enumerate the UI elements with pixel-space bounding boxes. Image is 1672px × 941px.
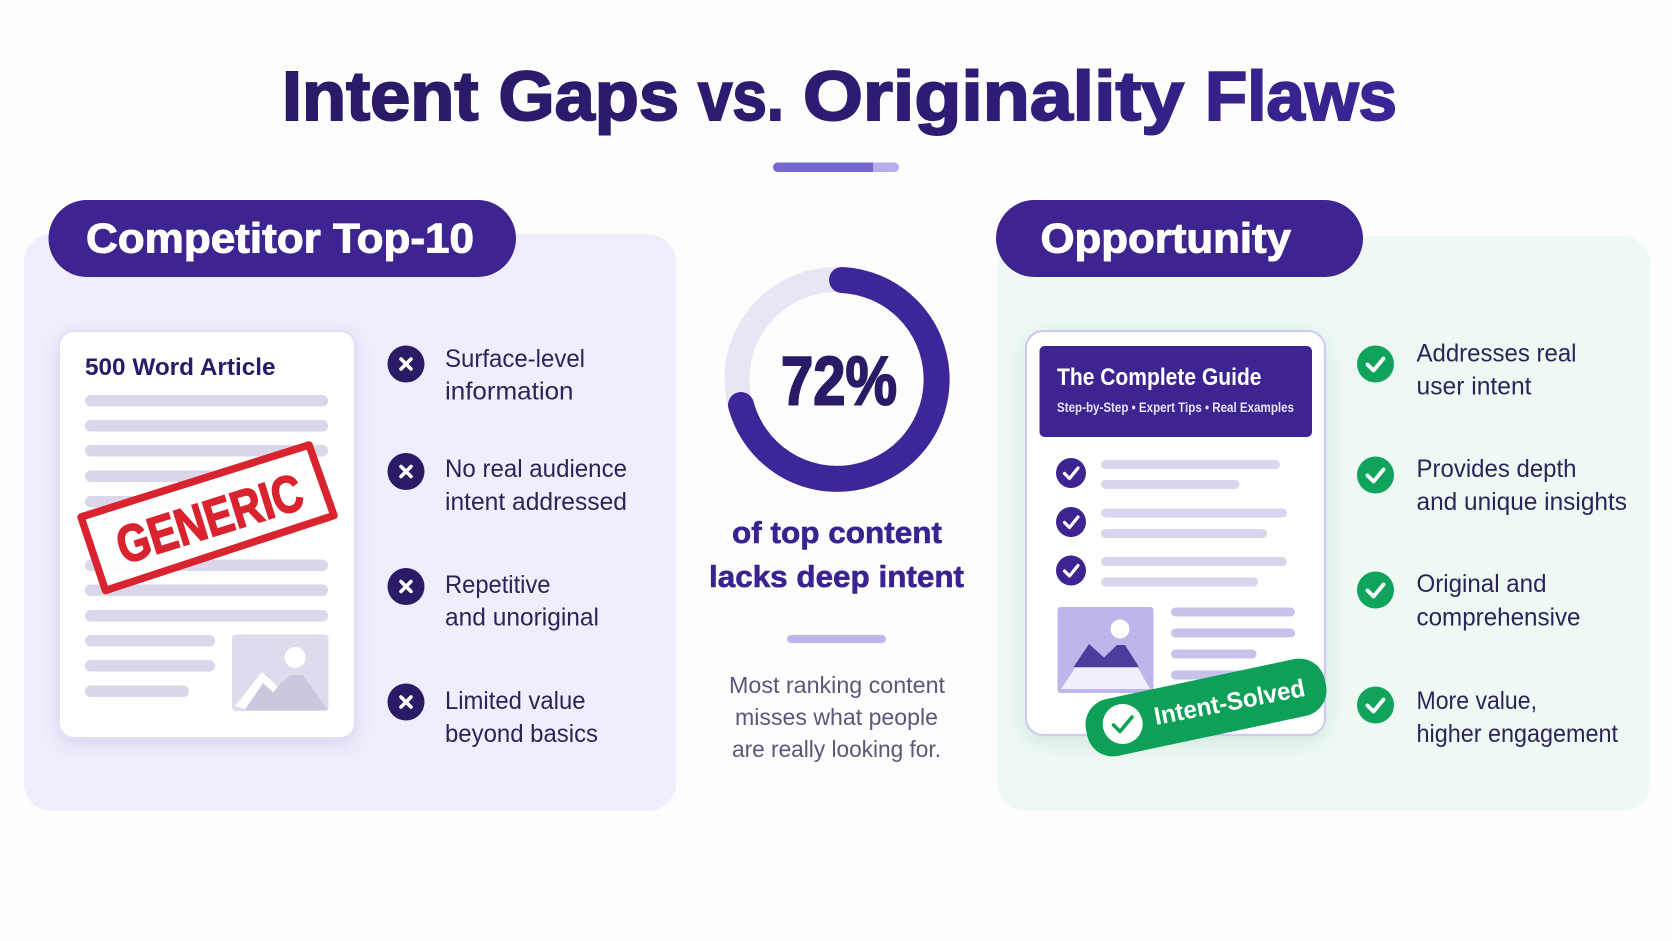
title: Intent Gaps [282, 57, 679, 135]
benefit 2: and unique insights [1416, 488, 1627, 516]
flaw 3: Repetitive [445, 571, 550, 599]
stat caption: of top content [732, 515, 942, 550]
benefit 1: Addresses real [1416, 340, 1576, 368]
list: opportunity benefits [1357, 340, 1627, 748]
supporting text [729, 672, 945, 762]
short divider [787, 635, 886, 643]
title: vs. [698, 57, 784, 135]
flaw 2: intent addressed [445, 488, 627, 516]
flaw 3 [388, 568, 599, 632]
article card: 500 word article [59, 331, 355, 738]
flaw 4: beyond basics [445, 720, 598, 748]
heading pill: opportunity [996, 200, 1363, 277]
benefit 4: More value, [1416, 687, 1537, 715]
flaw 2: No real audience [445, 455, 627, 483]
donut chart 72% [737, 280, 937, 479]
flaw 4 [388, 684, 598, 748]
flaw 2 [388, 453, 627, 516]
flaw 1 [388, 345, 585, 406]
guide text lines [1171, 608, 1295, 680]
benefit 3: Original and [1416, 570, 1546, 598]
checklist text lines [1101, 460, 1287, 586]
guide header: Step-by-Step • Expert Tips • Real Examples [1057, 400, 1294, 415]
guide header [1040, 346, 1312, 437]
benefit 3: comprehensive [1416, 604, 1580, 632]
donut chart 72%: 72% [781, 342, 897, 420]
stat caption [709, 515, 964, 594]
flaw 1: information [445, 378, 574, 406]
image placeholder [232, 634, 328, 711]
heading pill: competitor: Competitor Top-10 [86, 214, 474, 262]
center stat column [709, 280, 964, 762]
flaw 3: and unoriginal [445, 604, 599, 632]
supporting text: misses what people [735, 704, 938, 730]
benefit 4 [1357, 686, 1618, 748]
text placeholder lines [85, 395, 328, 697]
panel: opportunity [996, 200, 1650, 811]
flaw 4: Limited value [445, 687, 586, 715]
heading pill: competitor [48, 200, 516, 277]
benefit 4: higher engagement [1416, 720, 1618, 748]
title [282, 57, 1397, 135]
badge: intent-solved [1081, 654, 1331, 761]
stamp: generic: GENERIC [110, 463, 310, 576]
title underline [773, 162, 899, 172]
checklist icons [1056, 458, 1086, 586]
supporting text: are really looking for. [732, 736, 941, 762]
benefit 1 [1357, 340, 1576, 401]
benefit 2 [1357, 455, 1627, 516]
guide image placeholder [1058, 607, 1154, 693]
title: Flaws [1205, 57, 1397, 135]
panel: competitor top-10 [24, 200, 676, 811]
guide card [1026, 331, 1331, 761]
badge: intent-solved: Intent-Solved [1152, 674, 1307, 731]
card heading: 500 Word Article [85, 354, 276, 381]
guide header: The Complete Guide [1057, 364, 1262, 391]
flaw 1: Surface-level [445, 345, 585, 373]
benefit 3 [1357, 570, 1580, 632]
list: competitor flaws [388, 345, 627, 748]
stat caption: lacks deep intent [709, 559, 964, 594]
heading pill: opportunity: Opportunity [1040, 214, 1292, 262]
supporting text: Most ranking content [729, 672, 945, 698]
benefit 2: Provides depth [1416, 455, 1576, 483]
benefit 1: user intent [1416, 373, 1532, 401]
title: Originality [803, 57, 1184, 135]
